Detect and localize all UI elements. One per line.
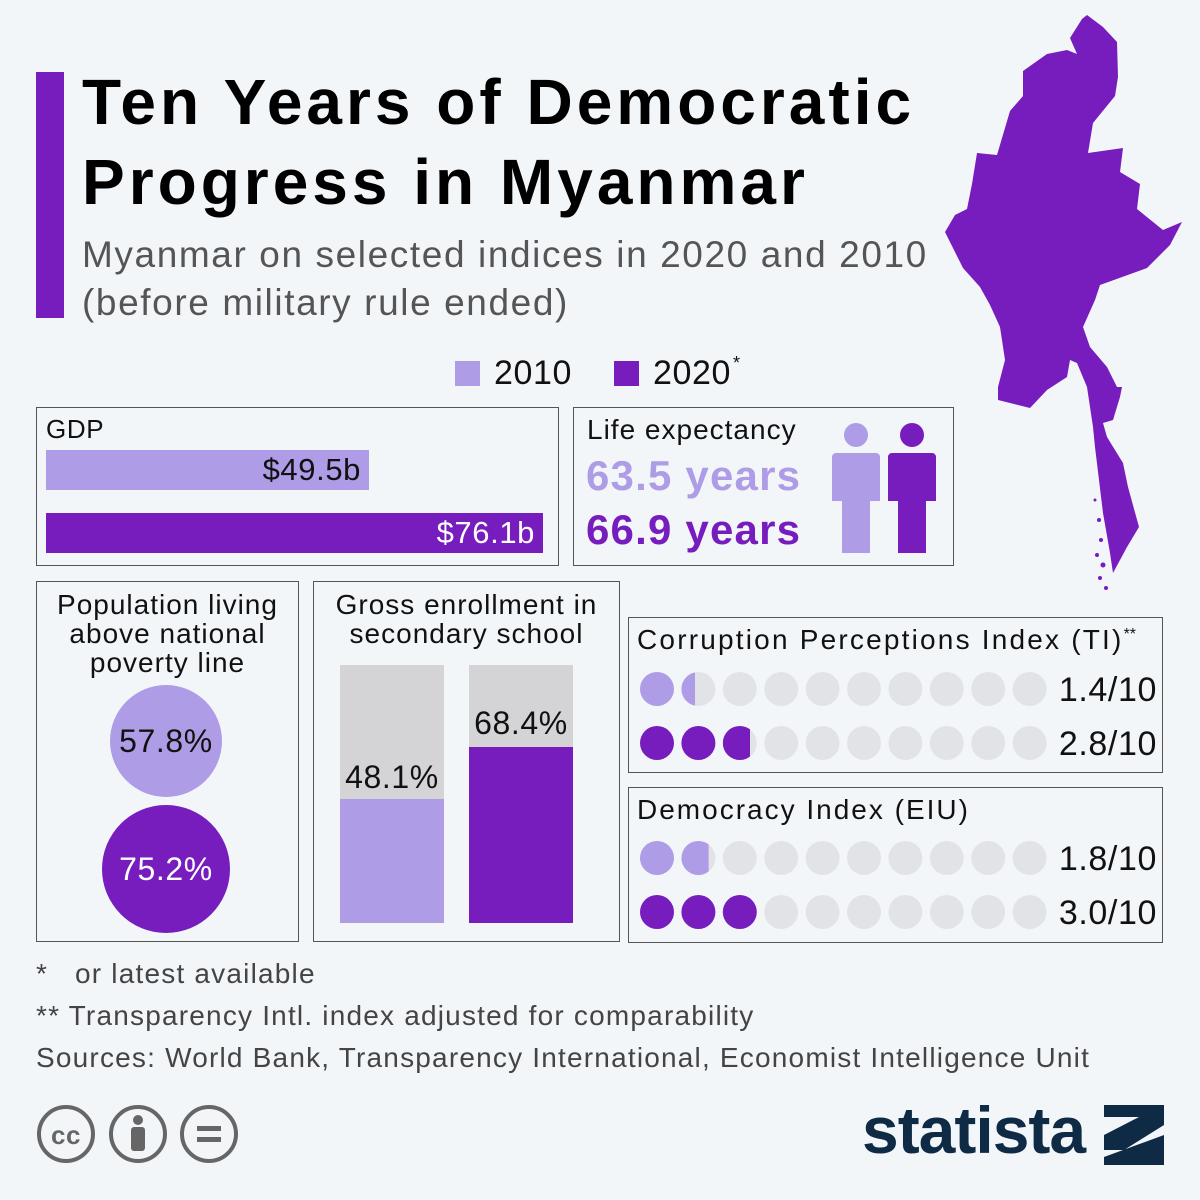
bar 2010 — [340, 665, 444, 923]
bar 2020: 68.4% — [474, 705, 568, 741]
legend: 2020 — [653, 354, 731, 392]
legend: 2010 — [494, 354, 572, 392]
dots: 1.4/10 — [1059, 671, 1157, 709]
panel: democracy index — [628, 787, 1163, 943]
dots: 2.8/10 — [1059, 725, 1157, 763]
heading: Population living — [57, 589, 278, 620]
bar 2010: 48.1% — [345, 759, 439, 795]
circle 2010: 57.8% — [119, 723, 213, 759]
legend — [455, 353, 741, 392]
panel: life expectancy — [573, 407, 954, 566]
circle 2020: 75.2% — [119, 851, 213, 887]
logo: statista: statista — [862, 1093, 1085, 1167]
dots: 3.0/10 — [1059, 894, 1157, 932]
value 2020: 66.9 years — [586, 506, 801, 553]
footnotes: * or latest available — [36, 958, 316, 989]
heading GDP: GDP — [46, 414, 104, 444]
icon: people — [832, 423, 936, 553]
footnotes — [36, 958, 1090, 1073]
panel: enrollment — [313, 581, 620, 942]
panel: corruption index — [628, 617, 1163, 773]
icons: creative commons: cc — [51, 1120, 81, 1150]
subtitle: (before military rule ended) — [82, 282, 569, 323]
dots — [640, 840, 1157, 932]
dots — [640, 671, 1157, 763]
bar 2010: $49.5b — [263, 452, 361, 487]
icons: creative commons — [37, 1105, 238, 1163]
subtitle — [82, 234, 928, 323]
bar 2020 — [46, 513, 543, 553]
heading: Gross enrollment in — [336, 589, 597, 620]
heading: secondary school — [350, 618, 583, 649]
bar 2020: $76.1b — [437, 515, 535, 550]
bar 2010 — [46, 450, 369, 490]
heading — [336, 589, 597, 649]
circle 2010 — [110, 685, 222, 797]
value 2010: 63.5 years — [586, 452, 801, 499]
title: Progress in Myanmar — [82, 146, 809, 218]
dots: 1.8/10 — [1059, 840, 1157, 878]
footnotes: Sources: World Bank, Transparency International, Economist Intelligence Unit — [36, 1042, 1090, 1073]
title: Ten Years of Democratic — [82, 66, 915, 138]
heading: poverty line — [90, 647, 245, 678]
title accent bar — [36, 72, 64, 318]
legend: * — [733, 353, 741, 373]
bar 2020 — [469, 665, 573, 923]
heading: above national — [69, 618, 266, 649]
heading: Corruption Perceptions Index (TI)** — [637, 624, 1136, 655]
title — [82, 66, 915, 218]
circle 2020 — [102, 805, 230, 933]
heading: Life expectancy — [587, 414, 797, 445]
heading — [57, 589, 278, 678]
panel: GDP — [36, 407, 559, 566]
subtitle: Myanmar on selected indices in 2020 and 2010 — [82, 234, 928, 275]
footnotes: ** Transparency Intl. index adjusted for comparability — [36, 1000, 754, 1031]
heading: Democracy Index (EIU) — [637, 794, 970, 825]
panel: poverty — [36, 581, 299, 942]
